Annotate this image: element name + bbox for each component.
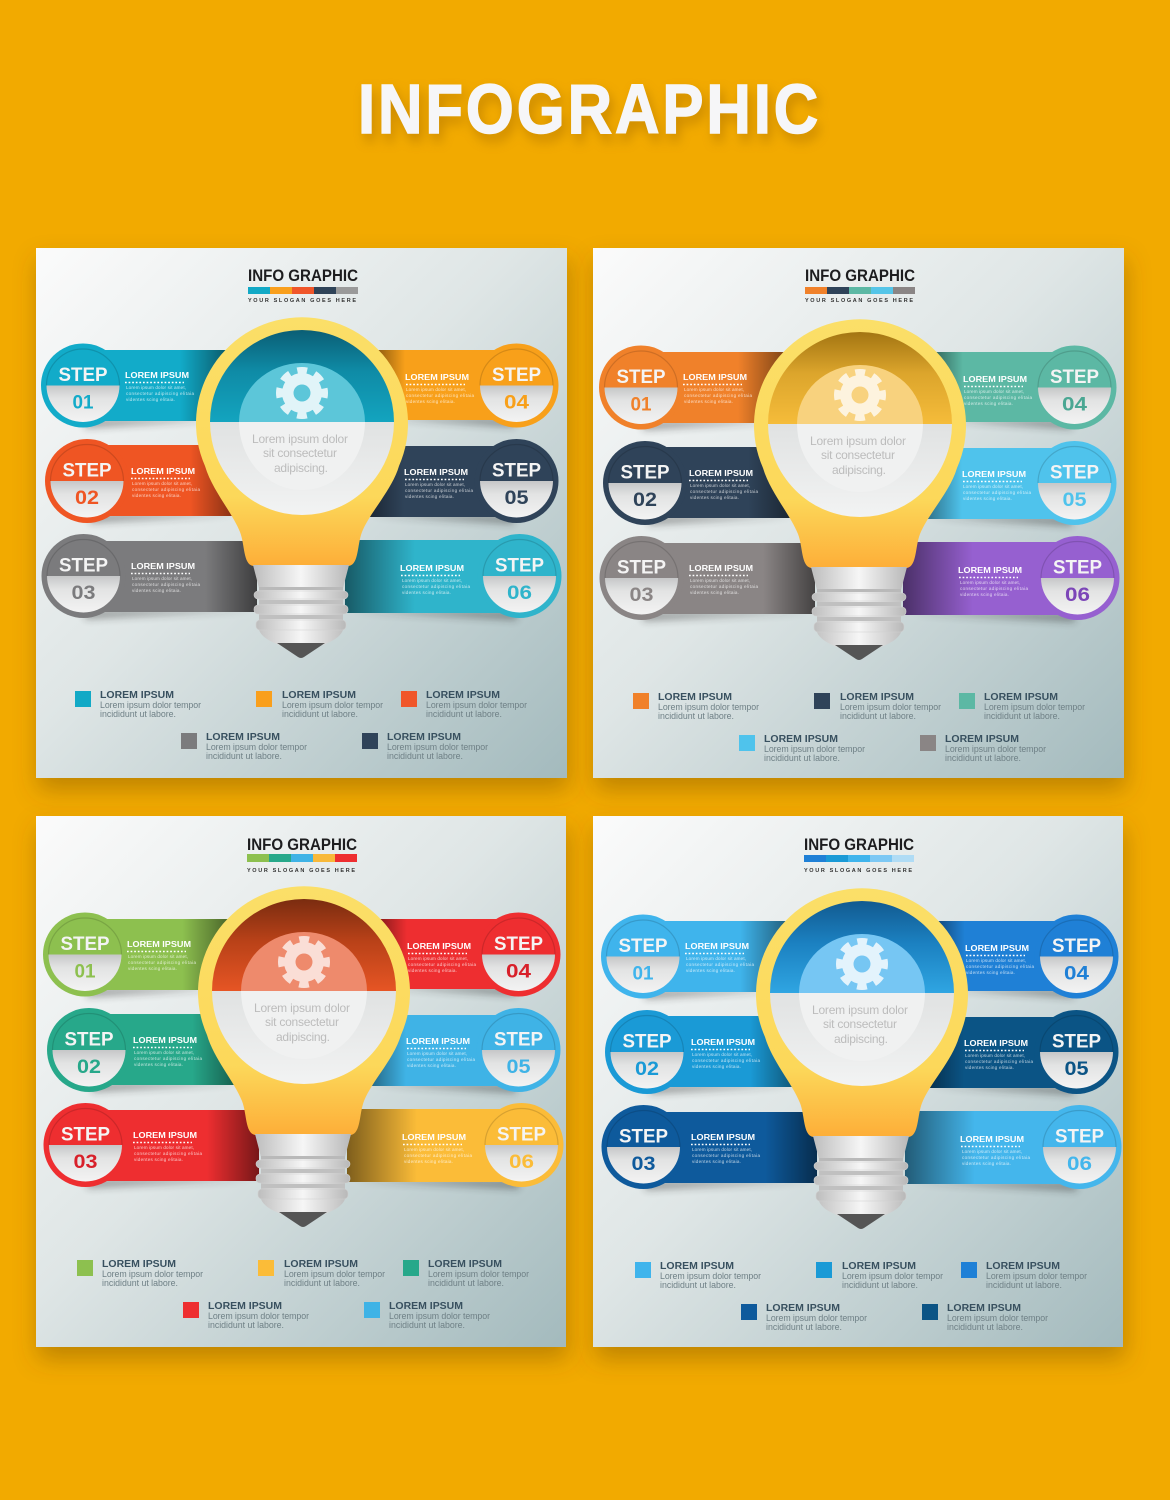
- header: INFO GRAPHIC: [248, 266, 358, 285]
- step 04: videntes scing elitaia.: [964, 401, 1013, 406]
- step 03: STEP: [617, 556, 666, 578]
- legend: incididunt ut labore.: [100, 709, 176, 719]
- step 01: STEP: [618, 935, 668, 957]
- step 05: Lorem ipsum dolor sit amet,: [963, 484, 1023, 489]
- header: YOUR SLOGAN GOES HERE: [247, 868, 355, 874]
- legend: LOREM IPSUM: [387, 731, 461, 743]
- step 05: consectetur adipiscing elitaia: [963, 490, 1031, 495]
- legend: [77, 1258, 529, 1330]
- legend: LOREM IPSUM: [100, 689, 174, 701]
- step 05: videntes scing elitaia.: [405, 494, 454, 499]
- step 06: [905, 1105, 1122, 1191]
- step 05: LOREM IPSUM: [962, 469, 1026, 479]
- step 03: [42, 534, 257, 619]
- step 01: videntes scing elitaia.: [126, 397, 175, 402]
- step 01: LOREM IPSUM: [125, 370, 189, 380]
- step 01: Lorem ipsum dolor sit amet,: [686, 956, 746, 961]
- step 03: LOREM IPSUM: [691, 1132, 755, 1142]
- step 06: LOREM IPSUM: [960, 1134, 1024, 1144]
- step 06: Lorem ipsum dolor sit amet,: [960, 580, 1020, 585]
- legend: LOREM IPSUM: [102, 1258, 176, 1270]
- legend: Lorem ipsum dolor tempor: [389, 1311, 490, 1321]
- light bulb: [196, 317, 408, 658]
- step 01: [41, 344, 230, 428]
- step 01: [599, 346, 788, 430]
- header: YOUR SLOGAN GOES HERE: [248, 298, 356, 304]
- step 04: Lorem ipsum dolor sit amet,: [406, 387, 466, 392]
- legend: LOREM IPSUM: [947, 1302, 1021, 1314]
- legend: incididunt ut labore.: [766, 1322, 842, 1332]
- step 01: videntes scing elitaia.: [686, 968, 735, 973]
- step 03: [602, 1105, 817, 1190]
- step 06: videntes scing elitaia.: [404, 1159, 453, 1164]
- step 06: Lorem ipsum dolor sit amet,: [404, 1147, 464, 1152]
- step 03: 03: [632, 1153, 656, 1175]
- step 06: STEP: [1055, 1126, 1104, 1148]
- step 03: LOREM IPSUM: [131, 561, 195, 571]
- step 03: LOREM IPSUM: [133, 1130, 197, 1140]
- light bulb: adipiscing.: [832, 463, 886, 477]
- panel: teal variant: [36, 248, 567, 778]
- step 02: consectetur adipiscing elitaia: [690, 489, 758, 494]
- step 03: videntes scing elitaia.: [690, 590, 739, 595]
- step 04: LOREM IPSUM: [405, 372, 469, 382]
- legend: Lorem ipsum dolor tempor: [840, 702, 941, 712]
- step 01: consectetur adipiscing elitaia: [684, 393, 752, 398]
- light bulb: adipiscing.: [276, 1030, 330, 1044]
- legend: Lorem ipsum dolor tempor: [206, 742, 307, 752]
- legend: LOREM IPSUM: [208, 1300, 282, 1312]
- light bulb: sit consectetur: [263, 446, 337, 460]
- step 02: consectetur adipiscing elitaia: [692, 1058, 760, 1063]
- legend: incididunt ut labore.: [764, 753, 840, 763]
- header: INFO GRAPHIC: [804, 835, 914, 854]
- step 05: STEP: [1052, 1030, 1101, 1052]
- step 04: [372, 344, 558, 428]
- step 03: Lorem ipsum dolor sit amet,: [132, 576, 192, 581]
- legend: Lorem ipsum dolor tempor: [102, 1269, 203, 1279]
- step 04: STEP: [494, 933, 543, 955]
- step 05: Lorem ipsum dolor sit amet,: [407, 1051, 467, 1056]
- step 04: LOREM IPSUM: [965, 943, 1029, 953]
- step 03: consectetur adipiscing elitaia: [690, 584, 758, 589]
- legend: Lorem ipsum dolor tempor: [986, 1271, 1087, 1281]
- step 06: LOREM IPSUM: [400, 563, 464, 573]
- step 02: STEP: [620, 462, 670, 484]
- step 01: Lorem ipsum dolor sit amet,: [684, 387, 744, 392]
- step 02: [45, 439, 240, 523]
- step 05: videntes scing elitaia.: [963, 496, 1012, 501]
- legend: incididunt ut labore.: [945, 753, 1021, 763]
- step 05: 05: [1064, 1058, 1089, 1080]
- legend: LOREM IPSUM: [282, 689, 356, 701]
- legend: incididunt ut labore.: [282, 709, 358, 719]
- step 05: STEP: [1050, 462, 1099, 484]
- step 05: LOREM IPSUM: [404, 467, 468, 477]
- step 03: 03: [74, 1151, 98, 1173]
- step 05: Lorem ipsum dolor sit amet,: [405, 482, 465, 487]
- light bulb: adipiscing.: [274, 461, 328, 475]
- step 02: videntes scing elitaia.: [134, 1062, 183, 1067]
- header: INFO GRAPHIC: [805, 266, 915, 285]
- legend: Lorem ipsum dolor tempor: [842, 1271, 943, 1281]
- step 01: STEP: [58, 364, 108, 386]
- step 01: LOREM IPSUM: [127, 939, 191, 949]
- step 06: videntes scing elitaia.: [962, 1161, 1011, 1166]
- step 06: videntes scing elitaia.: [402, 590, 451, 595]
- step 02: consectetur adipiscing elitaia: [134, 1056, 202, 1061]
- step 01: STEP: [60, 933, 110, 955]
- header: [805, 266, 915, 304]
- step 04: STEP: [492, 364, 541, 386]
- step 06: 06: [1065, 584, 1090, 606]
- legend: incididunt ut labore.: [658, 711, 734, 721]
- step 02: 02: [633, 489, 657, 511]
- legend: LOREM IPSUM: [660, 1260, 734, 1272]
- legend: incididunt ut labore.: [947, 1322, 1023, 1332]
- step 01: 01: [632, 962, 654, 984]
- step 01: consectetur adipiscing elitaia: [686, 962, 754, 967]
- header: INFO GRAPHIC: [247, 835, 357, 854]
- light bulb: sit consectetur: [823, 1017, 897, 1031]
- legend: incididunt ut labore.: [984, 711, 1060, 721]
- header: [247, 835, 357, 874]
- step 01: Lorem ipsum dolor sit amet,: [128, 954, 188, 959]
- step 02: 02: [75, 487, 99, 509]
- step 02: Lorem ipsum dolor sit amet,: [690, 483, 750, 488]
- legend: [635, 1260, 1087, 1332]
- step 03: videntes scing elitaia.: [132, 588, 181, 593]
- step 04: consectetur adipiscing elitaia: [964, 395, 1032, 400]
- legend: LOREM IPSUM: [284, 1258, 358, 1270]
- step 02: videntes scing elitaia.: [692, 1064, 741, 1069]
- legend: [633, 691, 1085, 763]
- step 03: [600, 536, 815, 621]
- legend: incididunt ut labore.: [284, 1278, 360, 1288]
- light bulb: [756, 888, 968, 1229]
- step 05: [922, 1010, 1118, 1095]
- legend: incididunt ut labore.: [387, 751, 463, 761]
- light bulb: [198, 886, 410, 1227]
- step 02: [603, 441, 798, 525]
- legend: Lorem ipsum dolor tempor: [208, 1311, 309, 1321]
- step 06: 06: [507, 582, 532, 604]
- step 06: Lorem ipsum dolor sit amet,: [962, 1149, 1022, 1154]
- step 04: Lorem ipsum dolor sit amet,: [408, 956, 468, 961]
- step 05: Lorem ipsum dolor sit amet,: [965, 1053, 1025, 1058]
- step 06: Lorem ipsum dolor sit amet,: [402, 578, 462, 583]
- legend: LOREM IPSUM: [984, 691, 1058, 703]
- step 04: Lorem ipsum dolor sit amet,: [966, 958, 1026, 963]
- legend: Lorem ipsum dolor tempor: [660, 1271, 761, 1281]
- step 01: Lorem ipsum dolor sit amet,: [126, 385, 186, 390]
- legend: Lorem ipsum dolor tempor: [282, 700, 383, 710]
- step 02: consectetur adipiscing elitaia: [132, 487, 200, 492]
- legend: LOREM IPSUM: [658, 691, 732, 703]
- step 05: [362, 439, 558, 524]
- step 06: [903, 536, 1120, 622]
- legend: Lorem ipsum dolor tempor: [766, 1313, 867, 1323]
- step 02: [47, 1008, 242, 1092]
- light bulb: adipiscing.: [834, 1032, 888, 1046]
- step 02: STEP: [64, 1028, 114, 1050]
- step 06: LOREM IPSUM: [958, 565, 1022, 575]
- step 05: 05: [1062, 489, 1087, 511]
- step 03: STEP: [59, 554, 108, 576]
- step 06: consectetur adipiscing elitaia: [960, 586, 1028, 591]
- legend: Lorem ipsum dolor tempor: [284, 1269, 385, 1279]
- legend: LOREM IPSUM: [840, 691, 914, 703]
- step 01: consectetur adipiscing elitaia: [126, 391, 194, 396]
- panel: blue variant: [593, 816, 1123, 1347]
- legend: LOREM IPSUM: [389, 1300, 463, 1312]
- step 05: videntes scing elitaia.: [965, 1065, 1014, 1070]
- step 02: STEP: [622, 1030, 672, 1052]
- step 04: 04: [504, 392, 529, 414]
- legend: incididunt ut labore.: [840, 711, 916, 721]
- step 04: consectetur adipiscing elitaia: [406, 393, 474, 398]
- legend: Lorem ipsum dolor tempor: [984, 702, 1085, 712]
- light bulb: Lorem ipsum dolor: [810, 434, 906, 448]
- step 05: 05: [506, 1056, 531, 1078]
- header: [804, 835, 914, 874]
- legend: incididunt ut labore.: [102, 1278, 178, 1288]
- step 01: [601, 914, 790, 999]
- light bulb: Lorem ipsum dolor: [252, 432, 348, 446]
- step 04: consectetur adipiscing elitaia: [408, 962, 476, 967]
- step 03: Lorem ipsum dolor sit amet,: [690, 578, 750, 583]
- step 05: STEP: [492, 460, 541, 482]
- step 03: [44, 1103, 259, 1188]
- legend: Lorem ipsum dolor tempor: [428, 1269, 529, 1279]
- step 02: Lorem ipsum dolor sit amet,: [132, 481, 192, 486]
- step 01: 01: [630, 394, 652, 416]
- step 03: consectetur adipiscing elitaia: [132, 582, 200, 587]
- legend: incididunt ut labore.: [206, 751, 282, 761]
- legend: incididunt ut labore.: [986, 1280, 1062, 1290]
- step 02: LOREM IPSUM: [133, 1035, 197, 1045]
- step 05: [364, 1008, 560, 1093]
- legend: Lorem ipsum dolor tempor: [426, 700, 527, 710]
- legend: Lorem ipsum dolor tempor: [100, 700, 201, 710]
- step 06: STEP: [495, 554, 544, 576]
- light bulb: [754, 319, 966, 660]
- step 02: LOREM IPSUM: [131, 466, 195, 476]
- legend: LOREM IPSUM: [766, 1302, 840, 1314]
- step 04: LOREM IPSUM: [407, 941, 471, 951]
- step 06: LOREM IPSUM: [402, 1132, 466, 1142]
- step 03: Lorem ipsum dolor sit amet,: [134, 1145, 194, 1150]
- legend: incididunt ut labore.: [208, 1320, 284, 1330]
- step 05: 05: [504, 487, 529, 509]
- step 04: consectetur adipiscing elitaia: [966, 964, 1034, 969]
- step 02: Lorem ipsum dolor sit amet,: [134, 1050, 194, 1055]
- step 05: STEP: [494, 1028, 543, 1050]
- step 03: consectetur adipiscing elitaia: [134, 1151, 202, 1156]
- step 06: STEP: [1053, 556, 1102, 578]
- step 04: LOREM IPSUM: [963, 374, 1027, 384]
- step 01: LOREM IPSUM: [685, 941, 749, 951]
- step 04: 04: [1064, 962, 1089, 984]
- step 06: 06: [1067, 1153, 1092, 1175]
- light bulb: Lorem ipsum dolor: [254, 1001, 350, 1015]
- step 02: videntes scing elitaia.: [690, 495, 739, 500]
- legend: Lorem ipsum dolor tempor: [764, 744, 865, 754]
- step 05: consectetur adipiscing elitaia: [405, 488, 473, 493]
- step 02: LOREM IPSUM: [691, 1037, 755, 1047]
- step 06: consectetur adipiscing elitaia: [962, 1155, 1030, 1160]
- step 02: videntes scing elitaia.: [132, 493, 181, 498]
- step 01: 01: [74, 960, 96, 982]
- legend: Lorem ipsum dolor tempor: [947, 1313, 1048, 1323]
- legend: incididunt ut labore.: [426, 709, 502, 719]
- step 06: STEP: [497, 1124, 546, 1146]
- step 04: STEP: [1052, 935, 1101, 957]
- step 04: 04: [1062, 394, 1087, 416]
- step 03: 03: [630, 584, 654, 606]
- step 06: videntes scing elitaia.: [960, 592, 1009, 597]
- step 03: videntes scing elitaia.: [692, 1159, 741, 1164]
- legend: [75, 689, 527, 761]
- legend: LOREM IPSUM: [426, 689, 500, 701]
- step 01: LOREM IPSUM: [683, 372, 747, 382]
- step 01: consectetur adipiscing elitaia: [128, 960, 196, 965]
- light bulb: sit consectetur: [821, 448, 895, 462]
- legend: incididunt ut labore.: [389, 1320, 465, 1330]
- legend: LOREM IPSUM: [986, 1260, 1060, 1272]
- step 02: 02: [77, 1056, 101, 1078]
- legend: LOREM IPSUM: [945, 733, 1019, 745]
- step 06: [345, 534, 562, 620]
- step 03: 03: [72, 582, 96, 604]
- step 05: consectetur adipiscing elitaia: [965, 1059, 1033, 1064]
- panel: warm variant: [593, 248, 1124, 778]
- step 04: [374, 912, 560, 996]
- step 01: [43, 912, 232, 997]
- step 04: videntes scing elitaia.: [408, 968, 457, 973]
- legend: Lorem ipsum dolor tempor: [387, 742, 488, 752]
- step 04: [930, 346, 1116, 430]
- step 05: LOREM IPSUM: [406, 1036, 470, 1046]
- step 05: LOREM IPSUM: [964, 1038, 1028, 1048]
- legend: incididunt ut labore.: [842, 1280, 918, 1290]
- step 02: STEP: [62, 460, 112, 482]
- light bulb: sit consectetur: [265, 1015, 339, 1029]
- step 03: LOREM IPSUM: [689, 563, 753, 573]
- step 06: consectetur adipiscing elitaia: [404, 1153, 472, 1158]
- legend: Lorem ipsum dolor tempor: [658, 702, 759, 712]
- step 02: [605, 1010, 800, 1094]
- step 06: 06: [509, 1151, 534, 1173]
- title: INFOGRAPHIC: [358, 69, 818, 148]
- step 01: videntes scing elitaia.: [128, 966, 177, 971]
- step 04: [932, 914, 1118, 998]
- step 04: 04: [506, 960, 531, 982]
- step 03: videntes scing elitaia.: [134, 1157, 183, 1162]
- step 01: videntes scing elitaia.: [684, 399, 733, 404]
- step 06: [347, 1103, 564, 1189]
- step 06: consectetur adipiscing elitaia: [402, 584, 470, 589]
- step 02: 02: [635, 1058, 659, 1080]
- step 04: videntes scing elitaia.: [406, 399, 455, 404]
- step 05: [920, 441, 1116, 526]
- step 04: Lorem ipsum dolor sit amet,: [964, 389, 1024, 394]
- legend: incididunt ut labore.: [660, 1280, 736, 1290]
- step 03: STEP: [619, 1126, 668, 1148]
- step 01: 01: [72, 392, 94, 414]
- step 04: STEP: [1050, 366, 1099, 388]
- step 02: Lorem ipsum dolor sit amet,: [692, 1052, 752, 1057]
- step 04: videntes scing elitaia.: [966, 970, 1015, 975]
- header: YOUR SLOGAN GOES HERE: [805, 298, 913, 304]
- panel: multicolour variant: [36, 816, 566, 1347]
- legend: LOREM IPSUM: [428, 1258, 502, 1270]
- light bulb: Lorem ipsum dolor: [812, 1003, 908, 1017]
- step 03: STEP: [61, 1124, 110, 1146]
- legend: Lorem ipsum dolor tempor: [945, 744, 1046, 754]
- step 03: Lorem ipsum dolor sit amet,: [692, 1147, 752, 1152]
- legend: LOREM IPSUM: [842, 1260, 916, 1272]
- legend: LOREM IPSUM: [206, 731, 280, 743]
- step 03: consectetur adipiscing elitaia: [692, 1153, 760, 1158]
- step 05: consectetur adipiscing elitaia: [407, 1057, 475, 1062]
- header: [248, 266, 358, 304]
- step 05: videntes scing elitaia.: [407, 1063, 456, 1068]
- step 02: LOREM IPSUM: [689, 468, 753, 478]
- legend: LOREM IPSUM: [764, 733, 838, 745]
- legend: incididunt ut labore.: [428, 1278, 504, 1288]
- step 01: STEP: [616, 366, 666, 388]
- header: YOUR SLOGAN GOES HERE: [804, 868, 912, 874]
